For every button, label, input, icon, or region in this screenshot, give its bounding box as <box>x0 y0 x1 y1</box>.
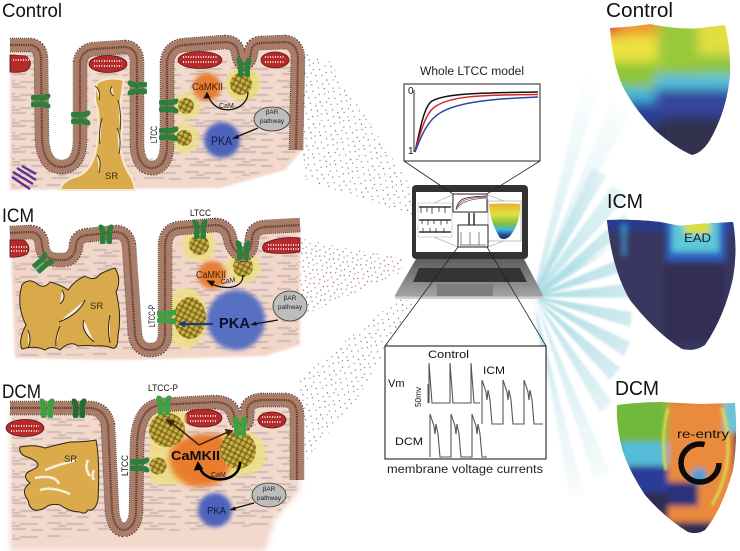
cell body: ICM <box>10 225 300 360</box>
mini heart <box>488 201 522 241</box>
organelle: golgi stack <box>12 166 36 189</box>
label: EAD: EAD <box>684 233 711 245</box>
CaMKII: DCM <box>169 434 232 487</box>
label: re-entry: re-entry <box>677 427 729 441</box>
mini connectors <box>434 195 504 247</box>
CaMKII: ICM: CaMKII <box>196 270 226 281</box>
label: LTCC-P: LTCC-P <box>148 383 178 394</box>
PKA to LTCC-P arrow: ICM <box>178 320 213 328</box>
chart: membrane voltage traces <box>385 346 546 459</box>
membrane: DCM <box>10 400 297 530</box>
mini traces panel <box>418 203 452 237</box>
beta-AR pathway: ICM: βAR <box>284 295 297 302</box>
PKA: control: PKA <box>211 136 232 148</box>
cell body: DCM <box>10 400 300 551</box>
label: SR: SR <box>90 301 103 312</box>
laptop base <box>395 259 543 299</box>
CaMKII: control <box>192 73 223 101</box>
calcium clusters: ICM <box>174 235 253 339</box>
trace: DCM <box>430 414 487 457</box>
heading: DCM (right): DCM <box>615 378 659 400</box>
beta-AR pathway: control <box>232 107 290 139</box>
sarcoplasmic reticulum: control <box>60 79 135 190</box>
re-entry circular arrow <box>681 444 719 482</box>
CaM arrow: control: CaM <box>219 103 234 110</box>
calcium clusters: DCM <box>149 413 256 474</box>
PKA: control <box>204 122 240 158</box>
membrane: control <box>10 42 298 168</box>
beta-AR pathway: control: pathway <box>260 118 285 125</box>
dotted wedge: ICM panel to laptop <box>298 238 402 318</box>
beta-AR pathway: ICM <box>250 291 307 326</box>
label: DCM: DCM <box>395 436 423 448</box>
panel: ICM cardiomyocyte <box>10 208 307 360</box>
heading: ICM (left): ICM <box>2 206 34 227</box>
CaM arrow: ICM <box>208 275 243 288</box>
mitochondria: control <box>10 52 289 72</box>
sarcoplasmic reticulum: DCM <box>20 440 99 513</box>
zoom lines: chart to laptop <box>404 161 540 194</box>
label: LTCC-P: LTCC-P <box>147 305 158 327</box>
PKA: ICM: PKA <box>219 315 250 332</box>
heading: Control (left): Control <box>2 1 62 22</box>
mini LTCC chart <box>453 194 487 212</box>
membrane: ICM <box>10 225 300 350</box>
heart: DCM <box>616 402 736 534</box>
label: LTCC: LTCC <box>120 455 131 476</box>
keyboard <box>413 268 527 282</box>
panel: DCM cardiomyocyte <box>6 383 300 551</box>
yellow calcium halos: DCM <box>150 410 266 484</box>
mitochondria: ICM <box>10 238 300 257</box>
trace: ICM <box>482 380 543 424</box>
chart: Whole LTCC model curves: 1 <box>408 146 414 157</box>
PKA: DCM <box>198 493 232 527</box>
laptop screen <box>416 192 522 252</box>
heart: ICM <box>607 220 736 350</box>
beta-AR pathway: DCM <box>229 483 286 510</box>
yellow calcium halos: ICM <box>165 228 260 348</box>
label: Control: Control <box>428 349 469 361</box>
CaM arrow: control <box>204 92 248 110</box>
PKA: DCM: PKA <box>207 506 226 517</box>
label: LTCC: LTCC <box>149 126 160 143</box>
label: SR: SR <box>64 454 77 465</box>
LTCC channels: control <box>31 58 251 141</box>
CaM arrow: DCM: CaM <box>211 472 226 479</box>
sarcoplasmic reticulum: ICM <box>20 268 120 350</box>
beta-AR pathway: DCM: βAR <box>263 486 276 493</box>
chart: Whole LTCC model curves <box>404 84 540 161</box>
CaM arrow: ICM: CaM <box>220 277 236 286</box>
heading: ICM (right): ICM <box>607 191 643 213</box>
PKA: ICM <box>207 290 265 350</box>
label: ICM: ICM <box>483 365 505 377</box>
laptop <box>395 185 544 299</box>
label: SR: SR <box>105 171 118 182</box>
mitochondria: DCM <box>6 409 286 436</box>
heading: Whole LTCC model: Whole LTCC model <box>420 66 524 78</box>
laptop bezel <box>412 185 528 259</box>
CaMKII: control: CaMKII <box>192 82 223 93</box>
phosphorylation arrows: DCM <box>167 420 232 445</box>
CaMKII: DCM: CaMKII <box>171 448 220 463</box>
LTCC channels: ICM <box>31 220 250 324</box>
label: Vm: Vm <box>388 378 404 390</box>
yellow calcium halos: control <box>169 67 260 153</box>
dotted wedge: DCM panel to laptop <box>298 296 412 470</box>
trace: Control <box>429 363 480 403</box>
label: 50mv: 50mv <box>414 387 423 407</box>
chart: Whole LTCC model curves: 0 <box>408 86 414 97</box>
LTCC channels: DCM <box>40 396 247 472</box>
panel: Control cardiomyocyte <box>10 42 302 190</box>
calcium clusters: control <box>176 73 252 146</box>
heart: Control <box>610 24 730 155</box>
CaMKII: ICM <box>196 261 226 289</box>
cell body: control <box>10 42 302 190</box>
label: LTCC: LTCC <box>190 208 211 219</box>
light rays from laptop to hearts <box>533 60 636 497</box>
beta-AR pathway: ICM: pathway <box>278 304 303 311</box>
heading: Control (right): Control <box>606 0 673 22</box>
heading: DCM (left): DCM <box>2 382 41 403</box>
mini membrane voltage chart <box>458 225 488 247</box>
dotted wedge: control panel to laptop <box>303 52 412 216</box>
CaM arrow: DCM <box>194 462 240 479</box>
zoom lines: voltage panel to laptop <box>385 247 546 346</box>
caption: membrane voltage currents: membrane voltage currents <box>387 464 543 476</box>
beta-AR pathway: DCM: pathway <box>257 495 282 502</box>
beta-AR pathway: control: βAR <box>266 109 279 116</box>
